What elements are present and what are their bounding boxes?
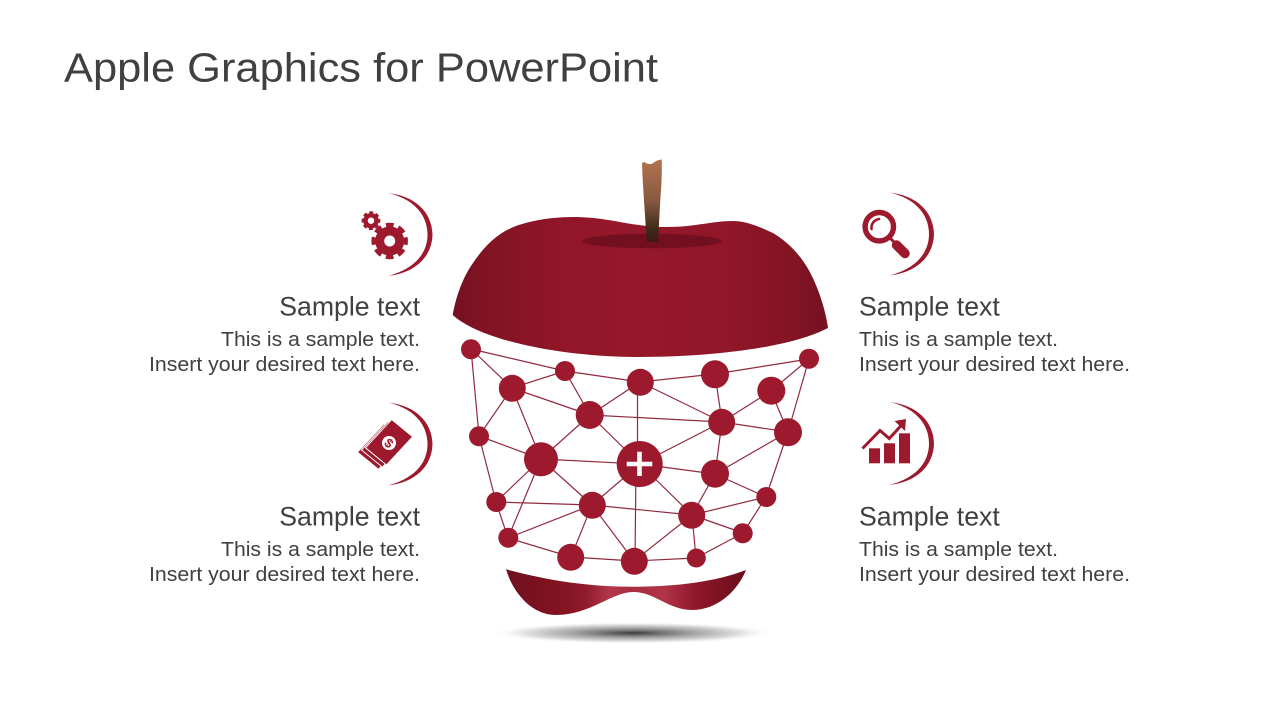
crescent: bottom left bbox=[388, 402, 432, 486]
icon: growth chart bbox=[862, 419, 910, 463]
apple ground shadow bbox=[491, 622, 775, 644]
description: This is a sample text. bbox=[859, 538, 1058, 561]
apple top cap bbox=[453, 217, 828, 357]
apple illustration bbox=[453, 160, 828, 644]
block: bottom left bbox=[149, 402, 432, 586]
description: Insert your desired text here. bbox=[859, 353, 1130, 376]
central plus node bbox=[617, 441, 663, 487]
icon: money bbox=[358, 420, 413, 469]
block: top left bbox=[149, 193, 432, 376]
description: This is a sample text. bbox=[221, 538, 420, 561]
network connections bbox=[471, 349, 809, 561]
description: Insert your desired text here. bbox=[149, 563, 420, 586]
description: This is a sample text. bbox=[859, 328, 1058, 351]
network nodes bbox=[461, 339, 819, 575]
crescent: bottom right bbox=[890, 402, 934, 485]
icon: gears bbox=[363, 213, 405, 256]
description bbox=[149, 328, 420, 376]
stem cavity bbox=[582, 234, 722, 248]
crescent: top left bbox=[388, 193, 432, 276]
heading: Sample text bbox=[859, 502, 1000, 532]
heading: Sample text bbox=[859, 292, 1000, 322]
description: Insert your desired text here. bbox=[149, 353, 420, 376]
title: Apple Graphics for PowerPoint bbox=[64, 44, 659, 90]
description bbox=[859, 328, 1130, 376]
block: bottom right bbox=[859, 402, 1130, 586]
description: This is a sample text. bbox=[221, 328, 420, 351]
icon: money: $ bbox=[381, 435, 397, 452]
heading: Sample text bbox=[279, 292, 421, 322]
apple bottom bbox=[506, 569, 746, 615]
crescent: top right bbox=[890, 192, 934, 276]
apple stem bbox=[642, 160, 662, 242]
icon: magnifier bbox=[865, 212, 905, 254]
heading: Sample text bbox=[279, 502, 421, 532]
description bbox=[859, 538, 1130, 586]
description: Insert your desired text here. bbox=[859, 563, 1130, 586]
description bbox=[149, 538, 420, 586]
block: top right bbox=[859, 192, 1130, 376]
